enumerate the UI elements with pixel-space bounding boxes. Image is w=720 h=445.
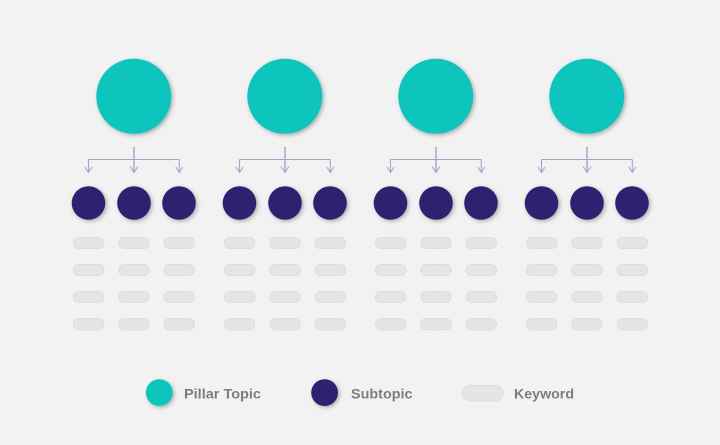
subtopic circles 2 xyxy=(223,186,347,220)
legend: pillar topic swatch xyxy=(146,379,173,406)
arrows 3 xyxy=(387,147,485,172)
pillar topic circle 1 xyxy=(96,59,171,134)
legend xyxy=(146,379,574,406)
panel: topic cluster 3 xyxy=(374,59,498,330)
subtopic circles 4 xyxy=(525,186,649,220)
legend: pillar topic label: Pillar Topic xyxy=(184,386,261,402)
pillar topic circle 3 xyxy=(398,59,473,134)
legend: subtopic swatch xyxy=(311,379,338,406)
keyword pills 3 xyxy=(375,237,497,330)
arrows 1 xyxy=(85,147,183,172)
subtopic circles 1 xyxy=(72,186,196,220)
legend: subtopic label: Subtopic xyxy=(351,386,413,402)
arrows 2 xyxy=(236,147,334,172)
pillar topic circle 4 xyxy=(549,59,624,134)
panel: topic cluster 1 xyxy=(72,59,196,330)
legend: keyword swatch xyxy=(462,385,503,401)
keyword pills 1 xyxy=(73,237,195,330)
panel: topic cluster 4 xyxy=(525,59,649,330)
subtopic circles 3 xyxy=(374,186,498,220)
legend: keyword label: Keyword xyxy=(514,386,574,402)
panel: topic cluster 2 xyxy=(223,59,347,330)
keyword pills 2 xyxy=(224,237,346,330)
keyword pills 4 xyxy=(526,237,648,330)
arrows 4 xyxy=(538,147,636,172)
pillar topic circle 2 xyxy=(247,59,322,134)
